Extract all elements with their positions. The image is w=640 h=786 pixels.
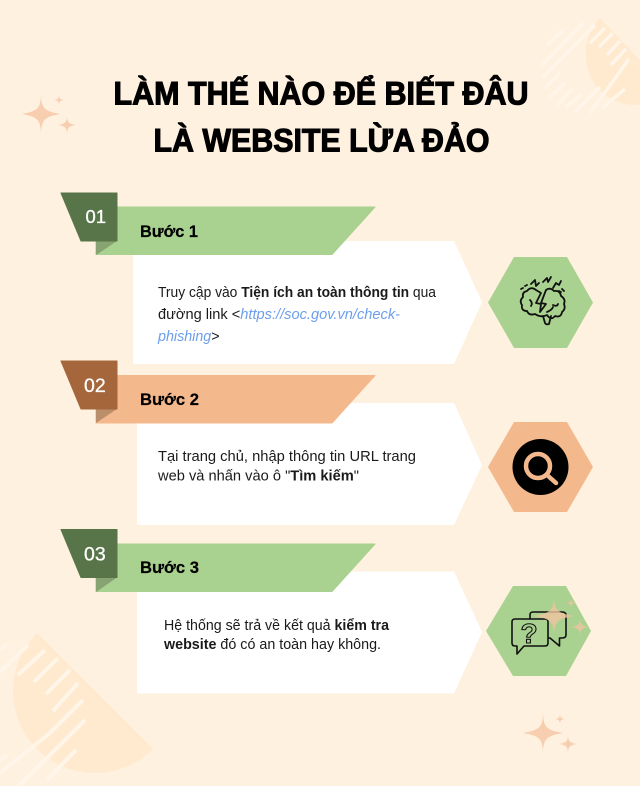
decoration: top right half disc with stripes [542,18,640,113]
decoration: sparkles top left [22,95,76,134]
step 2 ribbon: 02 [84,375,106,397]
decoration: bottom left half disc with stripes [0,633,153,785]
step 3 text: Hệ thống sẽ trả về kết quả kiểm tra [164,618,390,634]
hexagon icon: brain [488,257,593,348]
step 2 ribbon: Bước 2 [140,390,199,409]
step 3 text line 2: website đó có an toàn hay không. [163,637,381,653]
panel: step 2 card [137,403,482,525]
title: LÀ WEBSITE LỪA ĐẢO [154,122,490,158]
panel: step 3 card [137,572,482,694]
step 1 ribbon: 01 [86,206,106,227]
step 3 ribbon: 03 [84,544,106,566]
step 2 ribbon [61,361,375,423]
step 1 ribbon [61,193,375,255]
step 2 text line 2: web và nhấn vào ô "Tìm kiếm" [157,468,359,484]
decoration: sparkles bottom right [523,713,577,753]
hexagon icon: speech bubbles: ? [520,618,538,649]
sparkles over hexagon [534,596,589,636]
step 2 text: Tại trang chủ, nhập thông tin URL trang [158,449,416,465]
title [114,76,528,158]
step 1 link text [157,307,400,345]
step 3 ribbon: Bước 3 [140,558,199,577]
step 1 text: Truy cập vào Tiện ích an toàn thông tin qua [158,285,436,301]
step 1 link text: phishing> [157,329,220,345]
panel: step 1 card [133,241,482,364]
hexagon icon: magnifier [488,422,593,512]
step 3 ribbon [61,530,375,592]
step 1 ribbon: Bước 1 [140,222,198,241]
hexagon icon: speech bubbles [486,586,591,676]
step 1 link text: đường link <https://soc.gov.vn/check- [158,307,400,323]
title: LÀM THẾ NÀO ĐỂ BIẾT ĐÂU [114,76,528,112]
